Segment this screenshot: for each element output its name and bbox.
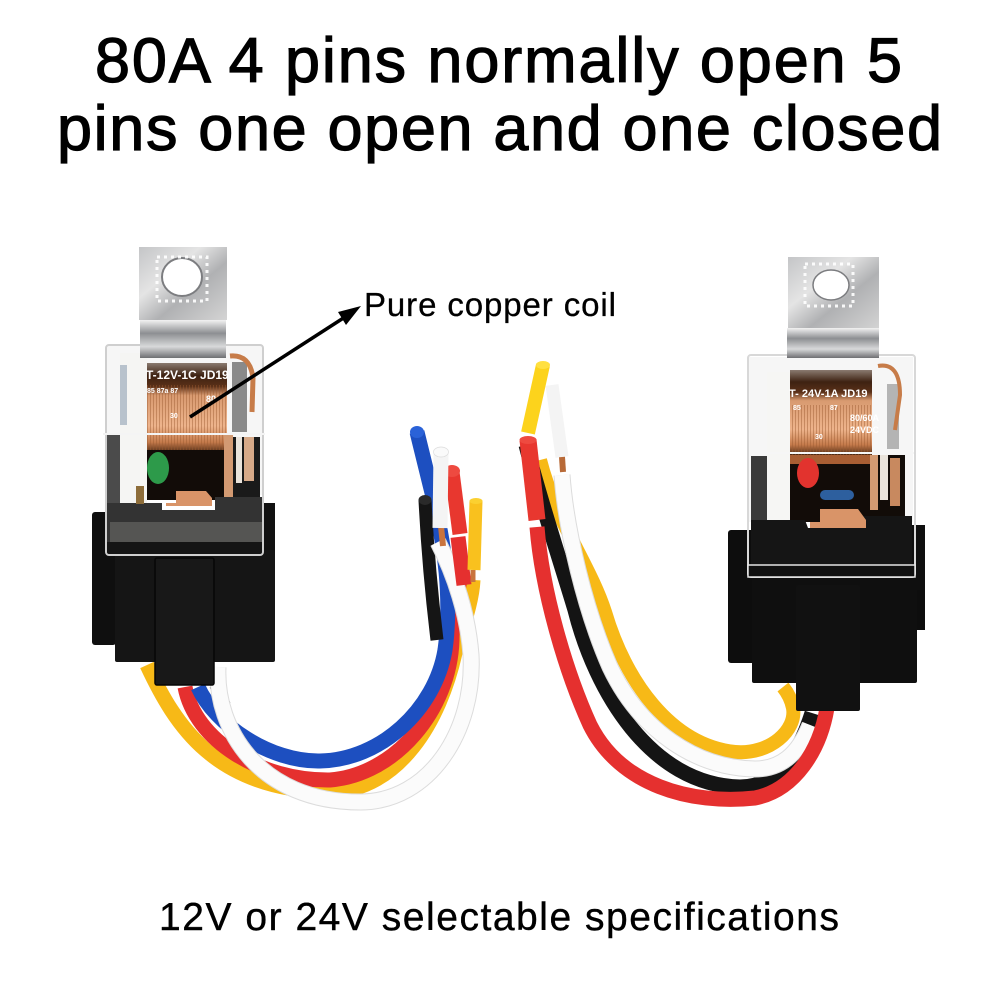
left relay wires <box>147 432 473 802</box>
socket base <box>728 525 925 711</box>
relay printing: 24VDC <box>850 425 880 435</box>
mounting bracket <box>139 247 227 358</box>
tip: red hole <box>444 465 460 477</box>
relay printing: 87 <box>830 405 838 412</box>
right relay <box>728 257 925 711</box>
tip: copper strand <box>470 570 476 582</box>
relay printing: 30 <box>170 413 178 420</box>
tip: red upper <box>452 472 460 534</box>
white post foot <box>136 486 144 504</box>
right relay wires <box>526 445 827 799</box>
wire: black stub <box>214 685 226 705</box>
wire: black <box>526 445 812 787</box>
relay printing <box>789 388 880 441</box>
relay printing: 30 <box>815 434 823 441</box>
copper contact <box>810 509 866 528</box>
LED: red <box>797 458 819 488</box>
wire: white <box>218 542 471 802</box>
tip: yellow <box>528 365 543 433</box>
wire: yellow <box>147 580 473 792</box>
wire: red <box>537 527 827 799</box>
left wire tips <box>410 426 482 585</box>
right wire tips <box>520 361 563 520</box>
wire: white <box>562 475 810 769</box>
mounting bracket <box>787 257 879 358</box>
tip: blue hole <box>410 426 424 438</box>
tip: yellow upper <box>474 501 476 570</box>
tip: white upper <box>552 385 562 457</box>
tip: copper strand <box>562 457 563 472</box>
socket base <box>92 503 275 685</box>
relay printing <box>146 368 229 420</box>
copper contact <box>166 491 212 506</box>
LED: green <box>147 452 169 484</box>
left relay <box>92 247 275 685</box>
title <box>57 26 942 164</box>
tip: yellow hole <box>536 361 550 369</box>
tip: white lip <box>434 447 448 457</box>
wire: red <box>185 580 460 780</box>
callout: pure copper coil: Pure copper coil <box>364 286 616 323</box>
resistor <box>820 490 854 500</box>
title: 80A 4 pins normally open 5 <box>95 26 902 96</box>
wire: yellow <box>540 460 793 752</box>
transparent cover <box>748 355 915 577</box>
relay printing: 85 <box>793 405 801 412</box>
title: pins one open and one closed <box>57 94 942 164</box>
relay printing: 80/60A <box>850 413 880 423</box>
relay printing: 80 <box>206 394 216 404</box>
tip: white upper <box>440 452 441 528</box>
relay printing: 85 87a 87 <box>147 388 178 395</box>
tip: red upper <box>528 440 537 520</box>
transparent cover <box>103 345 265 555</box>
relay printing: T- 24V-1A JD19 <box>789 388 867 400</box>
tip: yellow end <box>470 498 482 504</box>
tip: black hole <box>418 495 432 505</box>
caption: 12V or 24V selectable specifications <box>159 896 839 939</box>
arrow <box>190 306 361 417</box>
wire: blue <box>198 432 448 761</box>
tip: copper strand <box>441 526 443 546</box>
relay printing: T-12V-1C JD19 <box>146 368 229 382</box>
wire: black <box>425 500 437 640</box>
tip: red lower <box>458 537 464 585</box>
tip: red hole <box>520 436 536 444</box>
